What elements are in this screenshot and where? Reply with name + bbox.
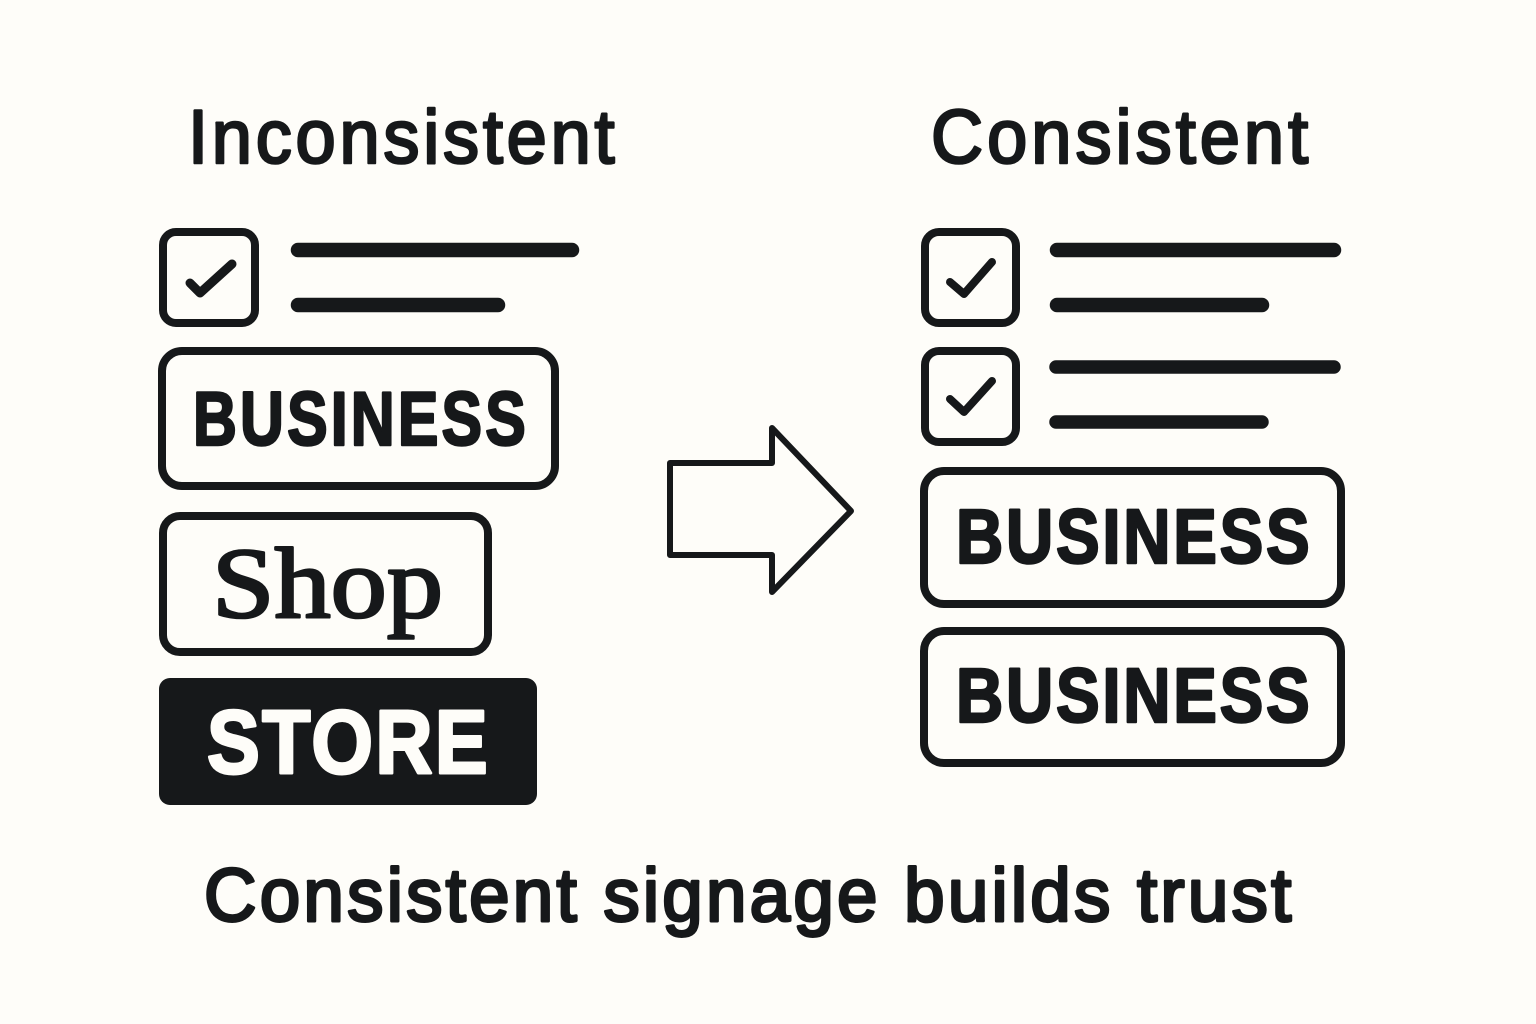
heading: Consistent: Consistent <box>931 94 1309 179</box>
panel: consistent signs <box>924 232 1341 763</box>
sign: BUSINESS bottom: BUSINESS <box>956 653 1310 739</box>
icon: checklist two <box>925 351 1334 442</box>
sign: Shop <box>163 516 488 652</box>
arrow <box>670 428 851 592</box>
sign: STORE <box>159 678 537 805</box>
sign: BUSINESS: BUSINESS <box>193 377 526 462</box>
sign: BUSINESS bottom <box>924 631 1341 763</box>
heading: Inconsistent: Inconsistent <box>188 94 615 179</box>
icon: checklist one <box>925 232 1334 323</box>
panel: inconsistent signs <box>159 232 572 805</box>
caption: Consistent signage builds trust <box>204 853 1291 937</box>
sign: BUSINESS top: BUSINESS <box>956 494 1310 580</box>
sign: Shop: Shop <box>212 527 443 639</box>
sign: BUSINESS top <box>924 471 1341 604</box>
sign: BUSINESS <box>162 351 555 486</box>
icon: checklist left <box>163 232 572 323</box>
sign: STORE: STORE <box>207 691 488 792</box>
